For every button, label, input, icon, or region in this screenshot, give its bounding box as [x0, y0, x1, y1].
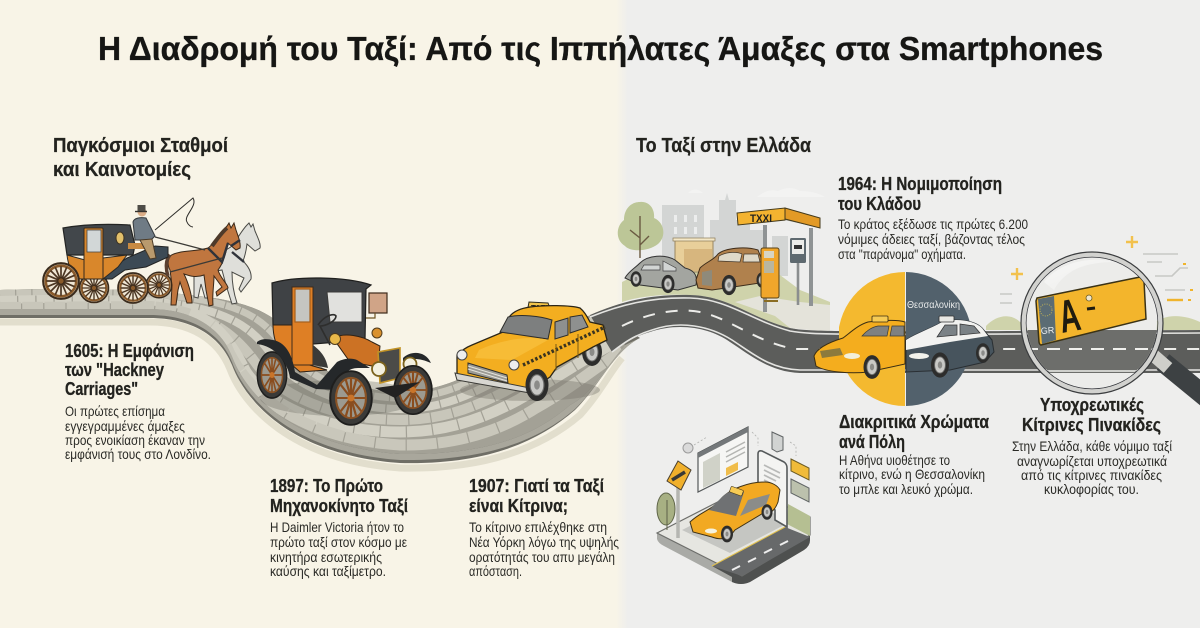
rear body — [273, 325, 327, 372]
text block: yellow plates: κυκλοφορίας του. — [1044, 481, 1139, 497]
near wheels — [43, 263, 79, 299]
text block: 1964: 1964: Η Νομιμοποίηση — [838, 174, 1002, 194]
text block: 1605: Οι πρώτες επίσημα — [65, 403, 165, 419]
lamps — [372, 362, 386, 376]
vehicle: 1907 yellow checker cab — [455, 302, 607, 401]
text block: 1605: εγγεγραμμένες άμαξες — [65, 418, 185, 434]
city label: Θεσσαλονίκη — [907, 299, 960, 311]
harness — [155, 237, 222, 272]
text block: 1605: των "Hackney — [65, 360, 164, 380]
text block: 1907: ορατότητάς του απυ μεγάλη — [469, 549, 615, 565]
white and blue taxi — [906, 316, 994, 378]
clouds — [688, 188, 825, 197]
text block: 1897: Μηχανοκίνητο Ταξί — [270, 496, 408, 517]
shadow pad — [682, 498, 790, 553]
small tree — [657, 493, 675, 530]
road soft shadow — [0, 322, 622, 468]
plate: GR — [1040, 325, 1055, 336]
text block: 1605: 1605: Η Εμφάνιση — [65, 341, 194, 361]
taxi stand canopy and pump — [737, 208, 820, 312]
far wheels — [80, 274, 108, 302]
decorative sparks and speed lines — [1000, 236, 1193, 303]
bus-stop sign — [790, 238, 806, 305]
text block: 1907: 1907: Γιατί τα Ταξί — [469, 476, 604, 497]
plate — [1036, 277, 1146, 345]
windshield and side windows — [500, 316, 552, 339]
checker stripe — [523, 327, 605, 365]
text block: 1605: εμφάνισή τους στο Λονδίνο. — [65, 446, 211, 462]
text block: 1897: κινητήρα εσωτερικής — [270, 549, 382, 565]
text block: yellow plates: από τις κίτρινες πινακίδες — [1021, 467, 1162, 483]
grey car — [625, 256, 696, 293]
roof sign: ΤΑΞΙ — [531, 304, 548, 313]
vehicle: horse-drawn carriage — [43, 198, 260, 306]
text block: yellow plates — [1012, 395, 1172, 497]
tree — [618, 202, 663, 258]
background: left cream half — [0, 0, 622, 628]
background: right grey half — [622, 0, 1200, 628]
text block: 1897: καύσης και ταξίμετρο. — [270, 563, 386, 579]
kiosk — [673, 238, 715, 272]
asphalt — [590, 295, 1200, 373]
vehicle: 1897 motor taxi — [257, 278, 432, 425]
curb — [0, 289, 640, 463]
section heading: global milestones: Παγκόσμιοι Σταθμοί — [53, 135, 228, 157]
phone — [758, 451, 787, 527]
app tiles — [683, 432, 809, 502]
carriage body — [63, 224, 135, 255]
brown horse — [168, 223, 240, 306]
text block: yellow plates: αναγνωρίζεται υποχρεωτικά — [1017, 453, 1167, 469]
text block: 1907: είναι Κίτρινα; — [469, 496, 568, 516]
handle — [1163, 362, 1200, 398]
yellow taxi — [814, 316, 905, 379]
brown car — [696, 248, 768, 295]
blue half: Thessaloniki — [906, 272, 970, 406]
white horse — [194, 223, 260, 304]
text block: 1605 — [65, 341, 211, 462]
text block: 1605: προς ενοικίαση έκαναν την — [65, 432, 205, 448]
section heading: global milestones — [53, 135, 228, 181]
green ground — [622, 268, 830, 330]
text block: 1964: στα "παράνομα" οχήματα. — [838, 246, 966, 262]
isometric taxi — [690, 482, 780, 542]
text block: 1964: νόμιμες άδειες ταξί, βάζοντας τέλος — [838, 231, 1025, 247]
driver — [133, 218, 155, 240]
isometric smartphone taxi scene — [657, 427, 810, 584]
steering — [318, 315, 336, 345]
grille — [468, 363, 508, 383]
text block: 1907: Το κίτρινο επιλέχθηκε στη — [469, 519, 607, 535]
canopy label: TXXI — [750, 213, 772, 225]
text block: 1907: απόσταση. — [469, 563, 522, 579]
green patch — [787, 504, 810, 536]
text block: 1897: Η Daimler Victoria ήτον το — [270, 519, 404, 535]
text block: city colours: ανά Πόλη — [839, 432, 905, 452]
lens — [1027, 258, 1157, 388]
base platform top — [657, 488, 810, 576]
magnifier with yellow plate — [986, 236, 1200, 398]
text block: 1897 — [270, 476, 408, 579]
yellow half: Athens — [839, 272, 905, 406]
whip — [155, 198, 194, 230]
vehicles: grey and brown cars at the stand — [625, 248, 768, 295]
text block: 1907: Νέα Υόρκη λόγω της υψηλής — [469, 534, 619, 550]
text block: 1897: 1897: Το Πρώτο — [270, 476, 383, 496]
title: Η Διαδρομή του Ταξί: Από τις Ιππήλατες Άμαξες στα Smartphones — [98, 30, 1103, 67]
text block: city colours — [839, 412, 989, 497]
base platform side — [657, 533, 810, 584]
map window — [698, 427, 748, 492]
road sign — [667, 461, 691, 538]
text block: 1897: πρώτο ταξί στον κόσμο με — [270, 534, 407, 550]
text block: 1964: Το κράτος εξέδωσε τις πρώτες 6.200 — [838, 216, 1028, 232]
hood — [333, 335, 380, 367]
text block: 1964: του Κλάδου — [838, 194, 921, 214]
rim — [1026, 257, 1158, 389]
plate: A — [1055, 289, 1084, 344]
text block: yellow plates: Στην Ελλάδα, κάθε νόμιμο ταξί — [1012, 438, 1172, 454]
roof sign — [527, 302, 552, 313]
road strip — [712, 527, 810, 576]
text block: 1964 — [838, 174, 1028, 262]
mirror sign — [366, 293, 387, 318]
text block: city colours: κίτρινο, ενώ η Θεσσαλονίκη — [839, 466, 985, 482]
city colours badge — [814, 272, 994, 406]
fuel pump — [761, 248, 779, 302]
text block: yellow plates: Κίτρινες Πινακίδες — [1022, 415, 1161, 435]
door — [292, 287, 313, 365]
cobble surface — [0, 289, 625, 454]
text block: 1605: Carriages" — [65, 379, 138, 399]
text block: yellow plates: Υποχρεωτικές — [1040, 395, 1144, 415]
hills — [986, 316, 1200, 330]
text block: city colours: το μπλε και λευκό χρώμα. — [839, 481, 973, 497]
scene: Greek taxi stand backdrop — [618, 188, 830, 332]
fenders — [257, 339, 370, 390]
section heading: global milestones: και Καινοτομίες — [53, 159, 191, 181]
city skyline — [662, 193, 788, 276]
text block: city colours: Η Αθήνα υιοθέτησε το — [839, 452, 950, 468]
text block: city colours: Διακριτικά Χρώματα — [839, 412, 989, 432]
road: cobblestone and asphalt — [0, 289, 1200, 468]
section heading: taxi in Greece: Το Ταξί στην Ελλάδα — [636, 135, 812, 157]
text block: 1907 — [469, 476, 619, 579]
